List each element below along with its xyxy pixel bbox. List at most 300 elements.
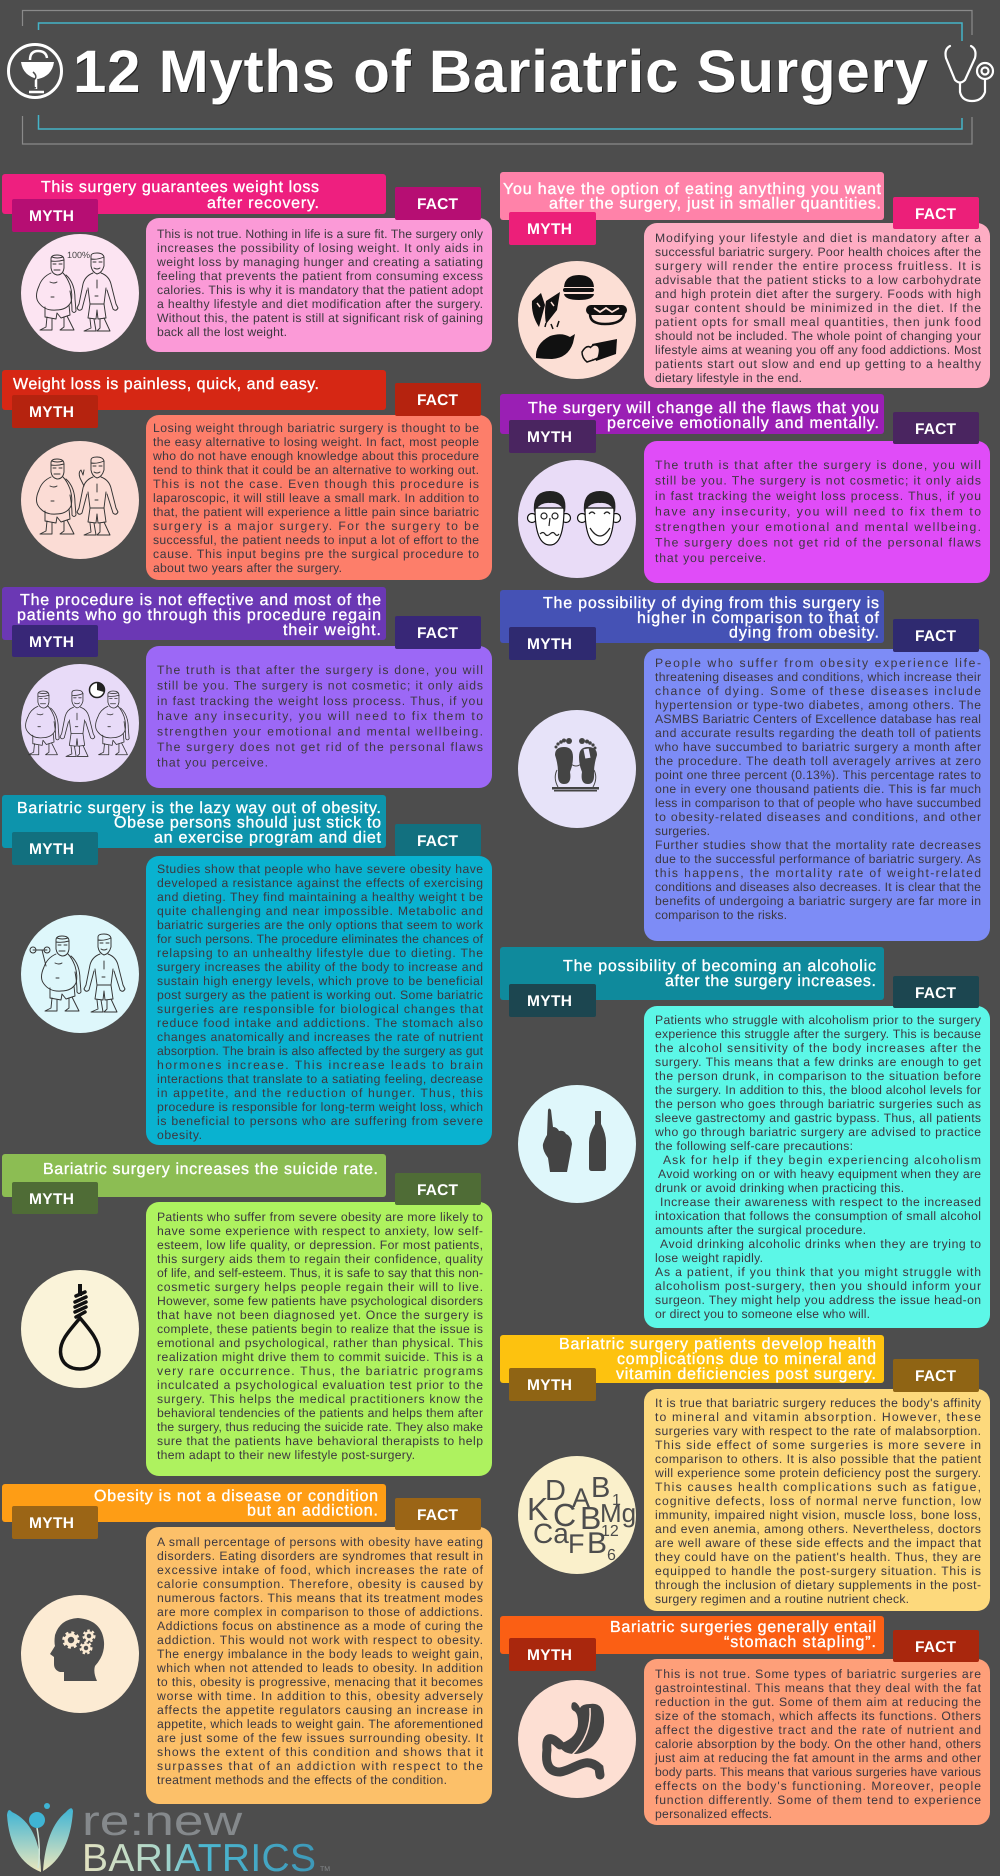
fact body: relapsing to an unhealthy lifestyle due to dieting. The: [157, 946, 483, 960]
fact tab: FACT: [417, 196, 459, 213]
fact body: Ask for help if they begin experiencing alcoholism: [663, 1153, 981, 1167]
fact tab: [893, 619, 979, 652]
fact body: strengthen your emotional and mental wellbeing.: [157, 725, 483, 739]
fact body: this surgery aids them to regain their confidence, quality: [157, 1252, 484, 1266]
fact body: affects the appetite regulators causing an increase in: [157, 1703, 483, 1717]
fact body: surgery will render the entire process fruitless. It is: [655, 259, 981, 273]
fact body: point one three percent (0.13%). This percentage rates to: [655, 768, 981, 782]
panel: myth 10 alcoholic: [500, 947, 990, 1328]
fact body: and high protein diet after the surgery. Foods with high: [655, 287, 981, 301]
myth tab: MYTH: [527, 636, 572, 653]
fact body: that have not been diagnosed yet. Once the surgery is: [157, 1308, 483, 1322]
fact body: sure that the patients have behavioral therapists to help: [157, 1434, 483, 1448]
fact body: equipped to handle the post-surgery situation. This is: [655, 1564, 981, 1578]
fact body: about two years after the surgery.: [153, 561, 342, 575]
fact tab: FACT: [915, 1368, 957, 1385]
fact body: and accurate results regarding the death toll of patients: [655, 726, 981, 740]
fact body: [146, 1202, 492, 1476]
icon: vitamin letters: 6: [607, 1547, 616, 1564]
fact body: this happens, the mortality rate of weight-related: [655, 866, 981, 880]
fact body: in fast tracking the weight loss process. Thus, if you: [157, 694, 483, 708]
panel: myth 2 painless: [2, 370, 492, 580]
fact body: who have succumbed to bariatric surgery a month after: [654, 740, 981, 754]
banner: [2, 1484, 386, 1522]
fact body: [644, 441, 990, 583]
fact body: less in comparison to that of people who have succumbed: [655, 796, 981, 810]
fact body: strengthen your emotional and mental wellbeing.: [655, 520, 981, 534]
fact body: amounts after the surgical procedure.: [655, 1223, 866, 1237]
fact body: and dieting. They find maintaining a healthy weight t be: [157, 890, 483, 904]
fact body: should not be included. The whole point of changing your: [655, 329, 981, 343]
myth heading: [94, 1488, 378, 1520]
panel: myth 3 not effective: [2, 587, 492, 788]
fact body: sleeve gastrectomy and gastric bypass. Thus, all patients: [655, 1111, 981, 1125]
fact body: drunk or avoid drinking when practicing this.: [655, 1181, 904, 1195]
fact body: back all the lost weight.: [157, 325, 287, 339]
fact body: benefits of undergoing a bariatric surgery are far more in: [655, 894, 981, 908]
fact body: surgery is a major surgery. For the surgery to be: [153, 519, 479, 533]
fact tab: [893, 197, 979, 229]
icon: vitamin letters: B: [587, 1527, 607, 1560]
fact body: procedure is responsible for long-term weight loss, which: [157, 1100, 483, 1114]
fact body: It is true that bariatric surgery reduces the body's affinity: [655, 1396, 982, 1410]
fact body: Avoid drinking alcoholic drinks when they are trying to: [660, 1237, 981, 1251]
fact body: realization might drive them to commit suicide. This is a: [157, 1350, 483, 1364]
fact body: surgeon. They might help you address the issue head-on: [655, 1293, 981, 1307]
fact body: the person drunk, in comparison to the situation before: [655, 1069, 981, 1083]
banner: [2, 174, 386, 214]
fact tab: FACT: [915, 985, 957, 1002]
myth tab: MYTH: [527, 221, 572, 238]
fact body: them adapt to their new lifestyle post-surgery.: [157, 1448, 415, 1462]
icon: logo leaves: [7, 1803, 73, 1872]
fact tab: FACT: [915, 628, 957, 645]
fact body: Avoid working on or with heavy equipment when they are: [658, 1167, 981, 1181]
fact body: [146, 218, 492, 352]
myth heading: [543, 595, 880, 642]
fact tab: [395, 824, 481, 856]
icon: bowl of Hygieia: [8, 44, 62, 98]
fact body: calorie consumption. Therefore, obesity is caused by: [157, 1577, 484, 1591]
myth tab: [509, 420, 596, 453]
myth heading: The procedure is not effective and most of the: [20, 592, 381, 609]
fact body: have any insecurity, you will need to fix them to: [157, 709, 483, 723]
fact body: just aim at reducing the fat amount in the arms and other: [654, 1751, 981, 1765]
fact body: lifestyle aims at weaning you off any food addictions. Most: [655, 343, 982, 357]
fact body: for such persons. The procedure eliminates the chances of: [157, 932, 484, 946]
myth tab: [12, 199, 98, 232]
fact body: obesity.: [157, 1128, 202, 1142]
panel: myth 5 suicide rate: [2, 1154, 492, 1476]
myth heading: Obesity is not a disease or condition: [94, 1488, 378, 1505]
fact tab: [893, 412, 979, 444]
icon: stomach: [518, 1680, 636, 1798]
fact body: surpasses that of an addiction with respect to the: [157, 1759, 483, 1773]
banner: [500, 172, 884, 220]
banner: [2, 1154, 386, 1197]
fact body: surgery regimen and a routine nutrient check.: [655, 1592, 909, 1606]
myth heading: [17, 592, 381, 639]
icon: head with gears: [21, 1595, 139, 1713]
fact body: bariatric surgeries are the only options that seem to work: [157, 918, 484, 932]
fact body: cause. This input begins pre the surgical procedure to: [153, 547, 479, 561]
fact body: experience this struggle after the surgery. This is because: [655, 1027, 981, 1041]
fact body: that, the patient will experience a little pain since bariatric: [153, 505, 479, 519]
fact body: This causes health complications such as fatigue,: [655, 1480, 981, 1494]
fact body: The energy imbalance in the body leads to weight gain,: [157, 1647, 483, 1661]
fact tab: [395, 383, 481, 416]
fact body: [644, 1006, 990, 1328]
icon: before and after men: 100%: [67, 250, 90, 260]
fact body: due to the successful performance of bariatric surgery. As: [655, 852, 981, 866]
fact body: conditions and diseases also decreases. It is clear that the: [655, 880, 981, 894]
fact tab: FACT: [915, 206, 957, 223]
brand name re:new: re:new: [82, 1797, 243, 1844]
fact body: still be you. The surgery is not cosmetic; it only aids: [157, 678, 483, 692]
fact body: hormones increase. This increase leads to brain: [157, 1058, 483, 1072]
fact tab: [893, 1630, 979, 1662]
fact body: threatening diseases and conditions, which increase their: [655, 670, 981, 684]
fact body: advisable that the patient sticks to a low carbohydrate: [655, 273, 981, 287]
banner: [2, 795, 386, 848]
fact body: People who suffer from obesity experience life-: [655, 656, 981, 670]
myth heading: Bariatric surgery is the lazy way out of obesity.: [17, 800, 381, 817]
fact body: are just some of the few issues surrounding obesity. It: [157, 1731, 484, 1745]
header frame: [22, 10, 972, 144]
myth tab: [12, 625, 98, 657]
fact body: shows the extent of this condition and shows that it: [157, 1745, 484, 1759]
myth tab: MYTH: [527, 1647, 572, 1664]
icon: men exercising: [21, 915, 139, 1033]
fact body: This is not the case. Even though this procedure is: [153, 477, 479, 491]
fact body: [644, 649, 990, 941]
icon: vitamin letters: 1: [612, 1492, 621, 1509]
myth heading: [17, 800, 382, 846]
myth heading: after recovery.: [207, 195, 319, 212]
fact body: alcoholism post-surgery, then you should inform your: [655, 1279, 981, 1293]
fact body: Addictions focus on abstinence as a mode of curing the: [157, 1619, 483, 1633]
fact body: and even anemia, among others. Nevertheless, doctors: [655, 1522, 981, 1536]
fact body: is beneficial to persons who are suffering from severe: [157, 1114, 483, 1128]
fact body: The surgery does not get rid of the personal flaws: [157, 740, 483, 754]
myth heading: their weight.: [283, 622, 381, 639]
fact tab: [893, 1359, 979, 1392]
myth heading: patients who go through this procedure regain: [17, 607, 381, 624]
fact body: have any insecurity, you will need to fix them to: [655, 504, 981, 518]
fact body: size of the stomach, which affects its functions. Others: [655, 1709, 981, 1723]
myth tab: [509, 627, 596, 660]
myth heading: [559, 1336, 876, 1383]
fact body: esteem, low life quality, or depression. For most patients,: [157, 1238, 483, 1252]
fact body: post surgery as the patient is working out. Some bariatric: [157, 988, 483, 1002]
icon: weight regain men and clock: [21, 664, 139, 782]
fact body: [644, 1389, 990, 1611]
fact body: The truth is that after the surgery is done, you will: [655, 458, 981, 472]
fact body: absorption. The brain is also affected by the surgery as gut: [157, 1044, 484, 1058]
fact body: sustain high energy levels, which prove to be beneficial: [157, 974, 483, 988]
fact body: effects on the body's functioning. Moreover, people: [655, 1779, 981, 1793]
myth heading: This surgery guarantees weight loss: [41, 179, 319, 196]
icon: vitamin letters: B: [580, 1500, 601, 1536]
myth heading: complications due to mineral and: [617, 1351, 876, 1368]
fact body: behavioral tendencies of the patients and helps them after: [157, 1406, 483, 1420]
fact body: successful bariatric surgery. Poor health choices after the: [655, 245, 981, 259]
fact body: very rare occurrence. Thus, the bariatric programs: [157, 1364, 483, 1378]
fact body: Patients who struggle with alcoholism prior to the surgery: [655, 1013, 982, 1027]
myth heading: higher in comparison to that of: [637, 610, 880, 627]
fact body: The surgery does not get rid of the personal flaws: [655, 536, 981, 550]
fact body: a healthy lifestyle and diet modification after the surgery.: [157, 297, 483, 311]
myth tab: MYTH: [29, 208, 74, 225]
fact body: changes anatomically and increases the rate of nutrient: [157, 1030, 484, 1044]
fact body: immunity, impaired night vision, muscle loss, bone loss,: [655, 1508, 981, 1522]
fact body: cosmetic surgery helps people regain their will to live.: [157, 1280, 483, 1294]
myth heading: an exercise program and diet: [154, 830, 382, 846]
myth heading: Bariatric surgery increases the suicide rate.: [43, 1161, 378, 1178]
fact tab: FACT: [915, 421, 957, 438]
fact tab: [893, 976, 979, 1008]
fact body: [146, 646, 492, 788]
icon: sad and happy faces: [518, 460, 636, 578]
myth tab: [12, 395, 98, 428]
fact body: A small percentage of persons with obesity have eating: [157, 1535, 483, 1549]
myth tab: MYTH: [29, 1515, 74, 1532]
myth heading: Bariatric surgeries generally entail: [610, 1619, 876, 1636]
icon: vitamin letters: A: [572, 1483, 590, 1513]
fact body: to this, obesity is progressive, menacing that it becomes: [157, 1675, 483, 1689]
fact tab: FACT: [417, 1507, 459, 1524]
icon: before and after men: [21, 234, 139, 352]
icon: men with thumbs up: [21, 441, 139, 559]
fact body: who go through bariatric surgery are advised to practice: [654, 1125, 981, 1139]
icon: vitamin letters: B: [591, 1472, 610, 1504]
fact body: lose weight rapidly.: [655, 1251, 763, 1265]
myth tab: MYTH: [527, 429, 572, 446]
fact tab: FACT: [417, 1182, 459, 1199]
fact tab: [395, 187, 481, 220]
fact body: The truth is that after the surgery is done, you will: [157, 663, 483, 677]
fact body: Further studies show that the mortality rate decreases: [655, 838, 981, 852]
banner: [500, 1335, 884, 1383]
myth heading: The surgery will change all the flaws that you: [528, 400, 879, 417]
banner: [2, 587, 386, 640]
fact body: comparison to others. It is also possible that the patient: [655, 1452, 982, 1466]
fact body: personalized effects.: [655, 1807, 772, 1821]
fact body: quite challenging and near impossible. Metabolic and: [157, 904, 483, 918]
fact body: Patients who suffer from severe obesity are more likely to: [157, 1210, 483, 1224]
myth heading: perceive emotionally and mentally.: [607, 415, 879, 432]
fact body: calorie absorption by the body. On the other hand, others: [655, 1737, 981, 1751]
fact body: As a patient, if you think that you might struggle with: [655, 1265, 981, 1279]
title: 12 Myths of Bariatric Surgery: [73, 38, 929, 105]
fact body: or direct you to someone else who will.: [655, 1307, 870, 1321]
fact tab: [395, 616, 481, 649]
myth heading: [503, 181, 882, 212]
myth heading: after the surgery, just in smaller quantities.: [549, 196, 881, 212]
fact body: surgery. This helps the medical practitioners know the: [157, 1392, 483, 1406]
panel: myth 9 dying: [500, 590, 990, 941]
myth heading: [528, 400, 879, 432]
icon: vitamin letters: K: [527, 1491, 548, 1527]
fact body: excessive intake of food, which increases the rate of: [157, 1563, 484, 1577]
fact body: This is not true. Some types of bariatric surgeries are: [655, 1667, 981, 1681]
myth tab: [509, 212, 596, 245]
myth heading: after the surgery increases.: [665, 973, 876, 990]
panel: myth 12 stapling: [500, 1616, 990, 1825]
fact body: appetite, which leads to weight gain. The aforementioned: [157, 1717, 483, 1731]
fact body: in fast tracking the weight loss process. Thus, if you: [655, 489, 981, 503]
fact body: [146, 856, 492, 1145]
fact body: numerous factors. This means that its treatment modes: [157, 1591, 483, 1605]
fact body: interactions that translate to a satiating feeling, decrease: [157, 1072, 483, 1086]
myth tab: [509, 1638, 596, 1671]
fact body: This is not true. Nothing in life is a sure fit. The surgery only: [157, 227, 484, 241]
myth heading: Obese persons should just stick to: [114, 814, 381, 832]
fact body: addiction. This would not work with respect to obesity.: [157, 1633, 483, 1647]
myth heading: The possibility of dying from this surgery is: [543, 595, 879, 612]
fact body: body parts. This means that various surgeries have various: [655, 1765, 981, 1779]
fact body: calories. This is why it is mandatory that the patient adopt: [157, 283, 484, 297]
fact tab: [395, 1173, 481, 1205]
myth heading: [610, 1619, 876, 1651]
myth tab: MYTH: [29, 1191, 74, 1208]
banner: [500, 1616, 884, 1654]
myth heading: You have the option of eating anything you want: [503, 181, 882, 198]
fact body: developed a resistance against the effects of exercising: [157, 876, 483, 890]
myth heading: but an addiction.: [247, 1502, 378, 1520]
fact body: This side effect of some surgeries is more severe in: [655, 1438, 981, 1452]
fact body: feeling that prevents the patient from consuming excess: [157, 269, 483, 283]
icon: vitamin letters: F: [568, 1529, 584, 1559]
icon: noose: [21, 1270, 139, 1388]
fact body: that you perceive.: [655, 551, 766, 565]
fact body: ASMBS Bariatric Centers of Excellence database has real: [655, 712, 981, 726]
fact body: cognitive defects, loss of normal nerve function, low: [655, 1494, 981, 1508]
fact body: comparison to the risks.: [655, 908, 787, 922]
banner: [2, 370, 386, 410]
panel: myth 7 eat anything: [500, 172, 990, 388]
fact body: treatment methods and the effects of the condition.: [157, 1773, 447, 1787]
fact body: one in every one thousand patients die. This is far much: [655, 782, 981, 796]
fact body: successful, the patient needs to input a lot of effort to the: [153, 533, 479, 547]
fact body: tend to think that it could be an alternative to working out.: [153, 463, 479, 477]
panel: myth 8 flaws: [500, 394, 990, 583]
fact body: [644, 223, 990, 388]
fact body: [146, 415, 492, 580]
fact body: they could have on the patient's health. Thus, they are: [655, 1550, 981, 1564]
myth tab: MYTH: [29, 634, 74, 651]
myth tab: MYTH: [527, 993, 572, 1010]
fact body: of life, and self-esteem. Thus, it is safe to say that this non-: [157, 1266, 483, 1280]
fact body: inculcated a psychological evaluation test prior to the: [157, 1378, 483, 1392]
fact body: Without this, the patent is still at significant risk of gaining: [157, 311, 483, 325]
myth tab: [12, 832, 98, 865]
myth tab: [509, 984, 596, 1017]
fact tab: FACT: [915, 1639, 957, 1656]
myth tab: MYTH: [29, 841, 74, 858]
fact body: reduction in the gut. Some of them aim at reducing the: [655, 1695, 981, 1709]
icon: stethoscope: [946, 46, 993, 101]
fact body: that you perceive.: [157, 755, 268, 769]
icon: junk food: [518, 261, 636, 379]
fact body: worse with time. In addition to this, obesity adversely: [156, 1689, 484, 1703]
myth tab: MYTH: [29, 404, 74, 421]
fact body: affect the digestive tract and the rate of nutrient and: [655, 1723, 981, 1737]
myth heading: The possibility of becoming an alcoholic: [563, 958, 876, 975]
myth tab: MYTH: [527, 1377, 572, 1394]
icon: vitamin letters: Mg: [600, 1498, 636, 1528]
fact body: Losing weight through bariatric surgery is thought to be: [153, 421, 479, 435]
fact body: disorders. Eating disorders are syndromes that result in: [157, 1549, 483, 1563]
fact body: surgery. This means that a few drinks are enough to get: [655, 1055, 982, 1069]
myth heading: Bariatric surgery patients develop health: [559, 1336, 876, 1353]
fact body: [644, 1659, 990, 1825]
panel: myth 1 guarantee: [2, 174, 492, 352]
fact body: dietary lifestyle in the end.: [655, 371, 802, 385]
myth heading: dying from obesity.: [729, 624, 879, 642]
icon: vitamin letters: 12: [601, 1523, 619, 1540]
fact body: in appetite, and the reduction of hunger. Thus, this: [157, 1086, 483, 1100]
fact body: hypertension or type-two diabetes, among others. The: [655, 698, 981, 712]
fact body: the person who goes through bariatric surgeries such as: [655, 1097, 981, 1111]
fact tab: FACT: [417, 392, 459, 409]
fact body: emotional and psychological, rather than physical. This: [157, 1336, 483, 1350]
myth heading: [41, 179, 319, 212]
fact body: still be you. The surgery is not cosmetic; it only aids: [655, 474, 981, 488]
trademark: TM: [320, 1866, 330, 1873]
fact body: complete, these patients begin to realize that the issue is: [157, 1322, 483, 1336]
myth tab: [12, 1506, 98, 1539]
banner: [500, 590, 884, 643]
fact body: the following self-care precautions:: [655, 1139, 853, 1153]
fact body: [146, 1527, 492, 1804]
fact body: are more complex in comparison to those of addictions.: [157, 1605, 483, 1619]
fact body: will experience some protein deficiency post the surgery.: [654, 1466, 981, 1480]
fact tab: FACT: [417, 625, 459, 642]
fact body: gastrointestinal. This means that they deal with the fat: [655, 1681, 982, 1695]
panel: myth 6 addiction: [2, 1484, 492, 1804]
fact body: the surgery. In addition to this, the blood alcohol levels for: [655, 1083, 981, 1097]
myth heading: vitamin deficiencies post surgery.: [616, 1366, 876, 1383]
myth heading: Weight loss is painless, quick, and easy.: [13, 376, 319, 393]
fact body: are well aware of these side effects and the impact that: [655, 1536, 982, 1550]
fact body: who do not have enough knowledge about this procedure: [152, 449, 479, 463]
fact tab: FACT: [417, 833, 459, 850]
fact body: the easy alternative to losing weight. In fact, most people: [153, 435, 479, 449]
fact body: the procedure. The death toll averagely arrives at zero: [655, 754, 981, 768]
icon: vitamin letters: Ca: [533, 1518, 569, 1549]
icon: vitamin letters: C: [553, 1497, 576, 1533]
icon: one finger and bottle: [518, 1085, 636, 1203]
fact body: surgeries are responsible for biological changes that: [157, 1002, 484, 1016]
logo: re:new Bariatrics: [7, 1797, 330, 1876]
fact body: to mineral and vitamin absorption. However, these: [655, 1410, 981, 1424]
myth tab: [12, 1182, 98, 1214]
fact body: the alcohol sensitivity of the body increases after the: [655, 1041, 981, 1055]
panel: myth 4 lazy way: [2, 795, 492, 1145]
fact body: chance of dying. Some of these diseases include: [655, 684, 981, 698]
fact body: surgery increases the ability of the body to increase and: [157, 960, 483, 974]
panel: myth 11 deficiencies: [500, 1335, 990, 1611]
fact tab: [395, 1498, 481, 1530]
fact body: which when not attended to leads to obesity. In addition: [156, 1661, 483, 1675]
fact body: Studies show that people who have severe obesity have: [157, 862, 483, 876]
icon: feet with tag: [518, 710, 636, 828]
fact body: the surgery, thus reducing the suicide rate. They also make: [157, 1420, 483, 1434]
banner: [500, 947, 884, 1000]
fact body: Modifying your lifestyle and diet is mandatory after a: [655, 231, 981, 245]
fact body: However, some few patients have psychological disorders: [157, 1294, 483, 1308]
